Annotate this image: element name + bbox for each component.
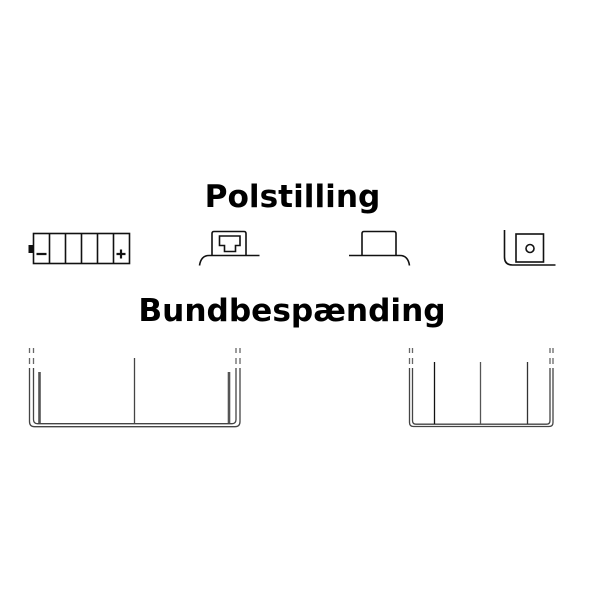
icon: battery top with terminals [28,234,130,264]
heading: Polstilling: Polstilling [205,179,380,215]
icon: left-side terminal with socket [200,232,260,266]
icon: corner terminal with circle [504,230,556,265]
icon: right-side terminal block [349,232,410,266]
heading: Bundbespænding: Bundbespænding [138,293,446,329]
diagram: bottom clamp, narrow tray [410,348,553,426]
diagram: bottom clamp, wide tray [30,348,240,427]
